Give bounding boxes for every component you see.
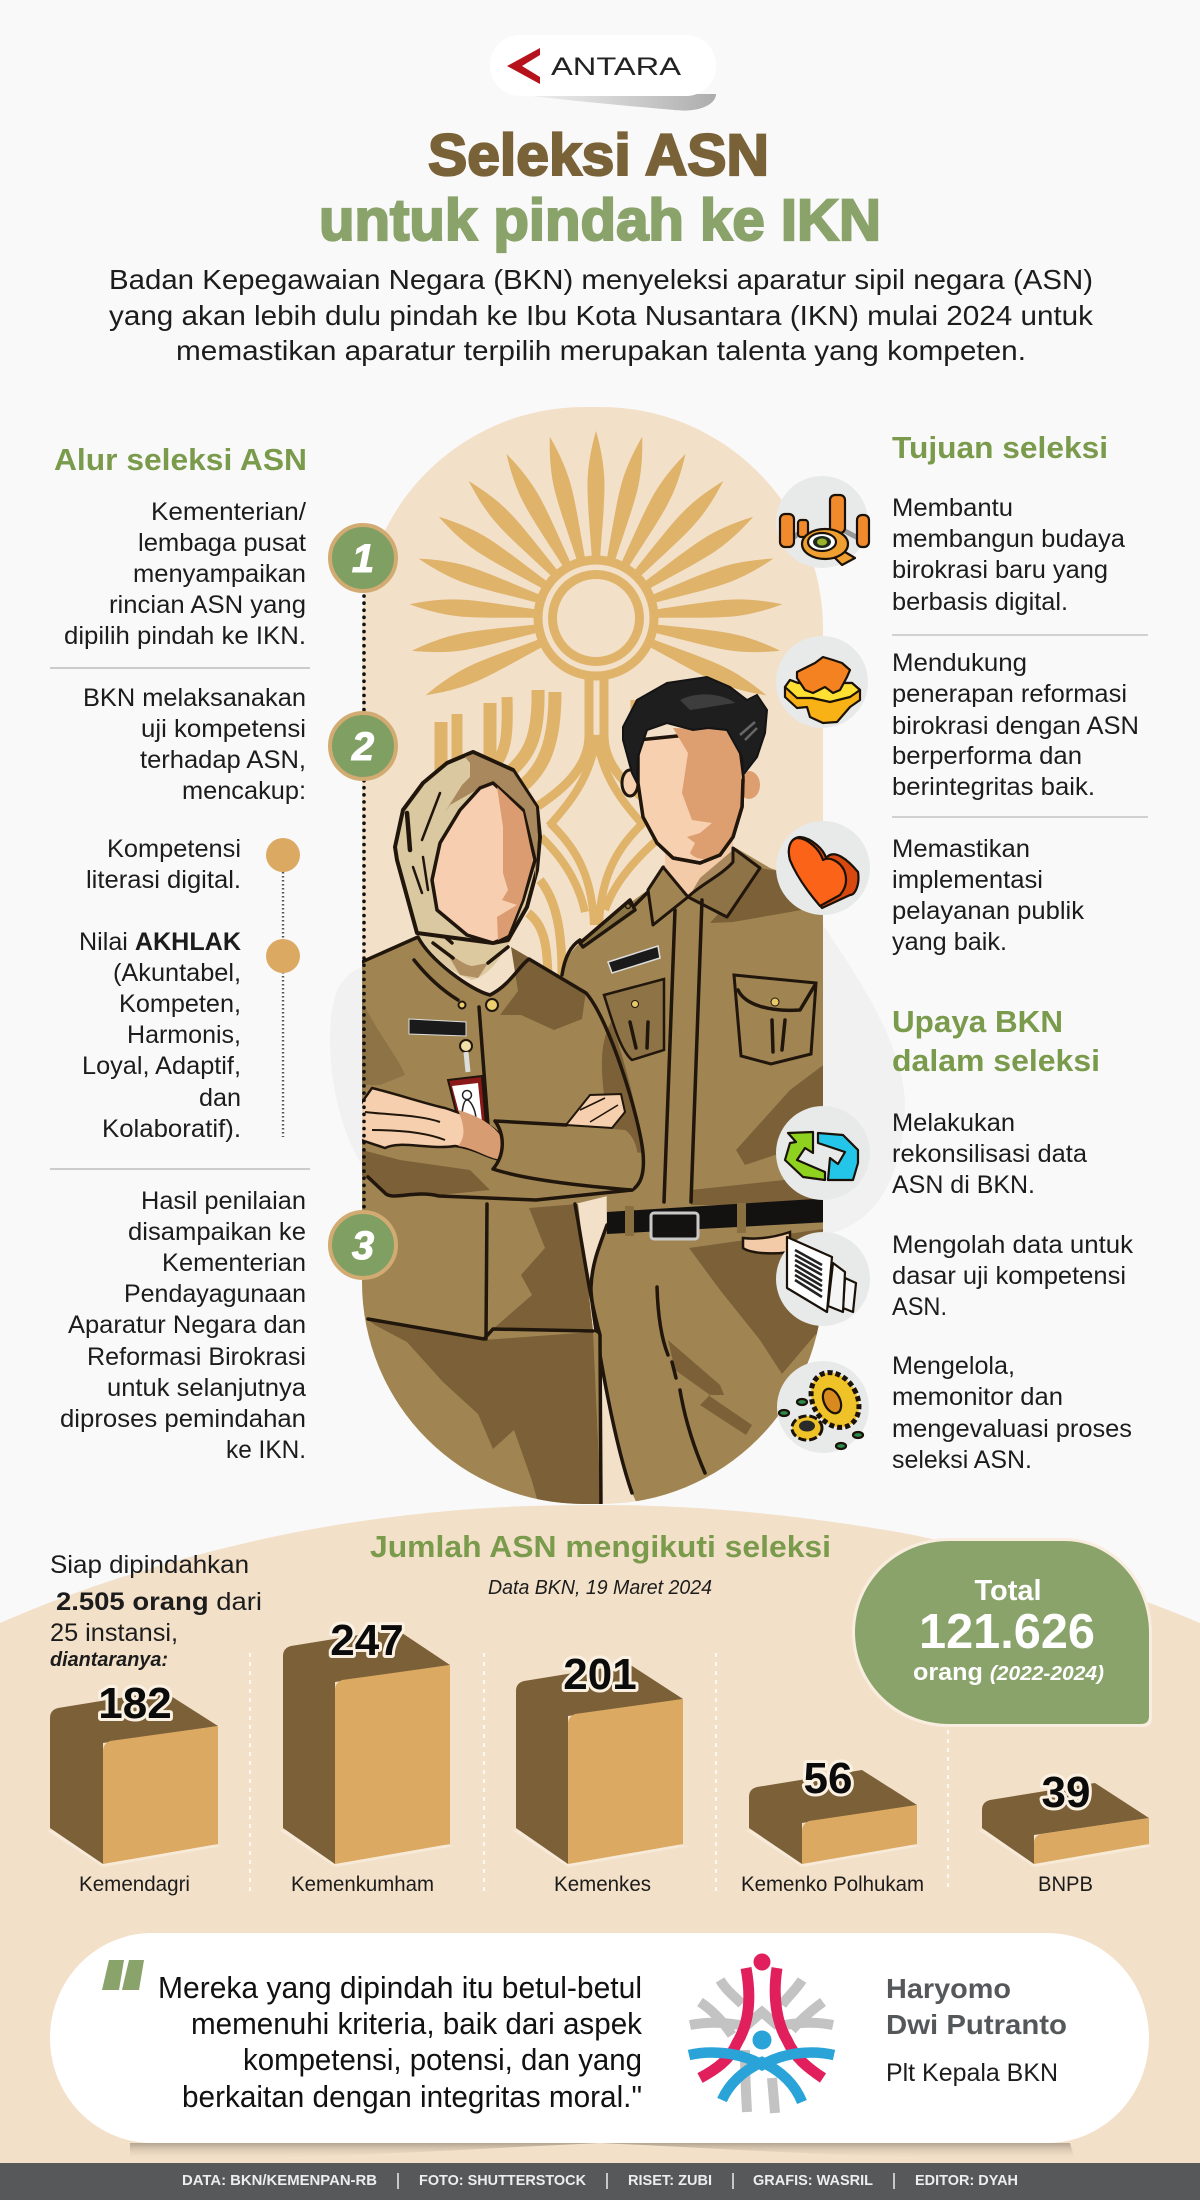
callout: total: orang (2022-2024) (913, 1659, 1104, 1686)
placket (664, 900, 702, 1202)
text: sub item AKHLAK: Kolaboratif). (102, 1115, 241, 1143)
bar: Kemenko Polhukam 56: Kemenko Polhukam (741, 1873, 924, 1896)
panel: quote (50, 1933, 1149, 2143)
icon: cycle arrows (776, 1106, 870, 1200)
text: step 1: dipilih pindah ke IKN. (64, 622, 306, 650)
quote shadow (130, 2143, 1075, 2160)
text: upaya 1 (892, 1109, 1087, 1199)
heading: tujuan seleksi: Tujuan seleksi (892, 430, 1108, 465)
text: upaya 3: mengevaluasi proses (892, 1415, 1132, 1443)
text: step 3 (60, 1187, 306, 1464)
text: sub item literasi: literasi digital. (86, 866, 241, 894)
intro text: memastikan aparatur terpilih merupakan talenta yang kompeten. (176, 335, 1026, 366)
bar: Kemenkes 201: Kemenkes (554, 1873, 651, 1896)
jacket lines (355, 937, 643, 1200)
text: step 2: terhadap ASN, (140, 746, 306, 774)
text: upaya 3: memonitor dan (892, 1383, 1063, 1411)
text: tujuan 2: penerapan reformasi (892, 680, 1127, 708)
text: step 3: Hasil penilaian (141, 1187, 306, 1215)
bar: Kemenkes 201 (512, 1650, 688, 1896)
background: peach wave (0, 1505, 1200, 2170)
footer bar (0, 2163, 1200, 2200)
text: speaker: Dwi Putranto (886, 2009, 1067, 2040)
text: step 3: Aparatur Negara dan (68, 1311, 306, 1339)
arch panel with illustration (355, 407, 830, 1510)
text: speaker (886, 1973, 1067, 2087)
name tag (608, 946, 660, 973)
text: step 1: menyampaikan (133, 560, 306, 588)
title: Seleksi ASN (428, 123, 769, 188)
text: upaya 1: rekonsilisasi data (892, 1140, 1087, 1168)
text: tujuan 3: pelayanan publik (892, 897, 1085, 925)
head (622, 770, 638, 796)
bar: BNPB 39: 39 (1042, 1768, 1090, 1817)
text: tujuan 2: berperforma dan (892, 742, 1082, 770)
text: upaya 2: ASN. (892, 1293, 947, 1321)
footer bar: RISET: ZUBI (628, 2172, 712, 2189)
text: siap dipindahkan: 2.505 orang dari (56, 1588, 262, 1616)
icon: documents (776, 1232, 870, 1326)
emblem: IKN sun (409, 431, 783, 703)
text: tujuan 1 (892, 494, 1125, 616)
text: step 3: disampaikan ke (128, 1218, 306, 1246)
text: step 3: Kementerian (162, 1249, 306, 1277)
text: tujuan 1: berbasis digital. (892, 588, 1068, 616)
text: tujuan 3: implementasi (892, 866, 1043, 894)
hijab (395, 752, 540, 943)
text: tujuan 1: membangun budaya (892, 525, 1125, 553)
bar: Kemenko Polhukam 56 (741, 1754, 924, 1896)
footer bar: FOTO: SHUTTERSTOCK (419, 2172, 586, 2189)
bar: Kemenkes 201: 201 (563, 1650, 637, 1699)
text: upaya 3: Mengelola, (892, 1352, 1015, 1380)
text: sub item AKHLAK: Loyal, Adaptif, (82, 1052, 241, 1080)
text: speaker: Haryomo (886, 1973, 1011, 2004)
pockets (604, 979, 664, 1060)
epaulet (580, 900, 635, 947)
text: upaya 1: Melakukan (892, 1109, 1015, 1137)
text: step 3: ke IKN. (226, 1436, 306, 1464)
ID badge (448, 1040, 486, 1125)
bar: Kemenkumham 247: Kemenkumham (291, 1873, 434, 1896)
logo: BKN (689, 1954, 834, 2113)
text: tujuan 3 (892, 835, 1085, 956)
panel: upaya BKN (892, 1004, 1134, 1474)
heading: upaya BKN: Upaya BKN (892, 1004, 1063, 1039)
text: speaker: Plt Kepala BKN (886, 2059, 1058, 2087)
text: step 3: diproses pemindahan (60, 1405, 306, 1433)
callout: total (852, 1538, 1152, 1727)
emblem: stem and diamond pattern (441, 676, 657, 985)
bar: Kemendagri 182: 182 (98, 1679, 172, 1728)
text: siap dipindahkan (50, 1551, 262, 1671)
bar: Kemenkumham 247 (279, 1616, 455, 1896)
heading: jumlah ASN (370, 1529, 831, 1599)
heading: jumlah ASN: Jumlah ASN mengikuti seleksi (370, 1529, 831, 1564)
text: step 2: BKN melaksanakan (83, 684, 306, 712)
step marker 2: 2 (351, 725, 374, 769)
bar: BNPB 39: BNPB (1038, 1873, 1093, 1896)
footer bar: EDITOR: DYAH (915, 2172, 1018, 2189)
text: tujuan 1: Membantu (892, 494, 1013, 522)
logo: ANTARA (490, 35, 716, 111)
step marker 1 (330, 525, 396, 591)
callout: total: 121.626 (919, 1605, 1095, 1659)
text: quote: memenuhi kriteria, baik dari aspek (191, 2006, 642, 2041)
heading: upaya BKN (892, 1004, 1100, 1078)
callout: total: Total (974, 1575, 1042, 1607)
text: upaya 1: ASN di BKN. (892, 1171, 1035, 1199)
text: step 3: Pendayagunaan (124, 1280, 306, 1308)
hand (743, 1232, 790, 1253)
bar: Kemenko Polhukam 56: 56 (804, 1754, 852, 1803)
text: quote: Mereka yang dipindah itu betul-betul (158, 1970, 642, 2005)
text: sub item AKHLAK: (Akuntabel, (113, 959, 241, 987)
dotted timeline (362, 596, 366, 1212)
text: upaya 3 (892, 1352, 1132, 1474)
belt (607, 1198, 830, 1234)
text: quote: kompetensi, potensi, dan yang (243, 2042, 642, 2077)
bar: Kemendagri 182: Kemendagri (79, 1873, 190, 1896)
text: siap dipindahkan: Siap dipindahkan (50, 1551, 249, 1579)
text: step 2: mencakup: (182, 777, 306, 805)
text: sub item AKHLAK: Kompeten, (119, 990, 241, 1018)
intro text: Badan Kepegawaian Negara (BKN) menyeleksi aparatur sipil negara (ASN) (109, 264, 1093, 295)
text: upaya 2 (892, 1231, 1134, 1321)
text: step 1 (64, 498, 306, 650)
text: quote: berkaitan dengan integritas moral." (182, 2079, 642, 2114)
text: step 3: untuk selanjutnya (107, 1374, 306, 1402)
icon: quote mark (102, 1960, 144, 1990)
text: siap dipindahkan: 25 instansi, (50, 1619, 178, 1647)
forearm sleeve (500, 1128, 638, 1188)
text: tujuan 2: birokrasi dengan ASN (892, 712, 1139, 740)
text: sub item AKHLAK: Harmonis, (127, 1021, 241, 1049)
panel: alur seleksi (50, 442, 310, 1464)
neck (665, 840, 733, 895)
text: sub item AKHLAK: dan (199, 1084, 241, 1112)
name tag (409, 1019, 466, 1036)
text: step 1: rincian ASN yang (109, 591, 306, 619)
bar: Kemendagri 182 (46, 1679, 222, 1896)
figures (355, 677, 830, 1510)
chart dividers (250, 1653, 948, 1892)
text: tujuan 1: birokrasi baru yang (892, 556, 1108, 584)
sub-timeline dots (266, 838, 300, 1137)
hijab neck (420, 934, 514, 980)
text: step 3: Reformasi Birokrasi (87, 1343, 306, 1371)
text: sub item AKHLAK: Nilai AKHLAK (79, 928, 241, 956)
text: tujuan 2: berintegritas baik. (892, 773, 1095, 801)
footer bar: DATA: BKN/KEMENPAN-RB (182, 2172, 377, 2189)
bar: Kemenkumham 247: 247 (330, 1616, 404, 1665)
bar: BNPB 39 (978, 1768, 1154, 1896)
text: tujuan 3: Memastikan (892, 835, 1030, 863)
title: untuk pindah ke IKN (319, 188, 881, 253)
face (432, 783, 535, 943)
step marker 2 (330, 713, 396, 779)
icon: heart (776, 821, 870, 915)
text: upaya 3: seleksi ASN. (892, 1446, 1032, 1474)
heading: jumlah ASN: Data BKN, 19 Maret 2024 (488, 1577, 712, 1599)
text: tujuan 2: Mendukung (892, 649, 1027, 677)
ghost shapes behind figures (330, 925, 905, 1235)
figure: woman (355, 752, 643, 1510)
text: upaya 2: dasar uji kompetensi (892, 1262, 1126, 1290)
panel: tujuan seleksi (892, 430, 1148, 956)
step marker 1: 1 (352, 537, 374, 581)
text: sub item AKHLAK (79, 928, 241, 1143)
text: step 1: lembaga pusat (138, 529, 306, 557)
text: upaya 2: Mengolah data untuk (892, 1231, 1134, 1259)
icon: puzzle (776, 636, 868, 728)
text: tujuan 2 (892, 649, 1139, 801)
step marker 3: 3 (352, 1224, 374, 1268)
figure: man (562, 677, 830, 1510)
heading: upaya BKN: dalam seleksi (892, 1043, 1100, 1078)
text: tujuan 3: yang baik. (892, 928, 1007, 956)
text: step 2 (83, 684, 306, 805)
text: siap dipindahkan: diantaranya: (50, 1649, 168, 1671)
footer bar: GRAFIS: WASRIL (753, 2172, 873, 2189)
title (319, 123, 881, 253)
intro text: yang akan lebih dulu pindah ke Ibu Kota Nusantara (IKN) mulai 2024 untuk (109, 300, 1094, 331)
text: quote (158, 1970, 642, 2114)
logo: ANTARA: ANTARA (551, 53, 681, 81)
icon: gears (777, 1361, 869, 1453)
text: step 2: uji kompetensi (141, 715, 306, 743)
hand left (355, 1088, 504, 1160)
heading: alur seleksi: Alur seleksi ASN (54, 442, 307, 477)
text: step 1: Kementerian/ (151, 498, 306, 526)
text: sub item literasi: Kompetensi (107, 835, 241, 863)
bar chart (46, 1616, 1154, 1896)
icon: machine parts (776, 476, 869, 568)
text: sub item literasi (86, 835, 241, 894)
intro text (109, 264, 1094, 366)
step marker 3 (330, 1212, 396, 1278)
